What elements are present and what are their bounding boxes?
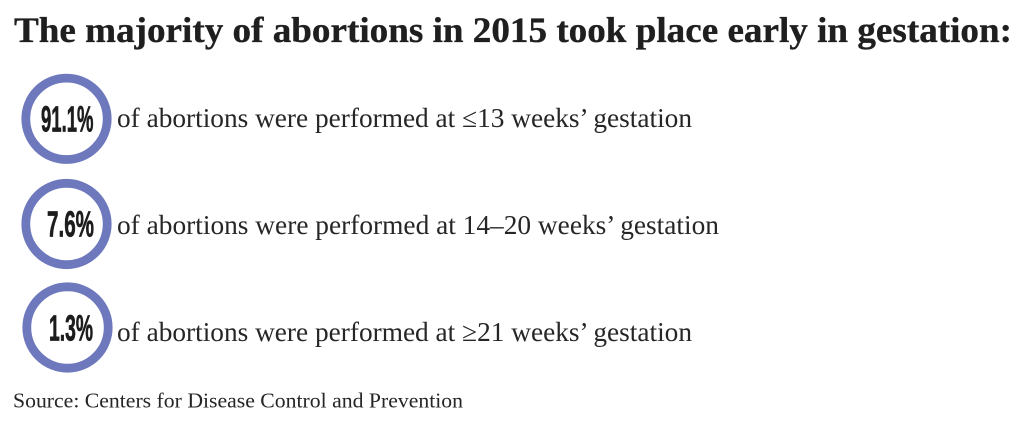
icon: ring 7.6% (26, 183, 107, 265)
value: 7.6%: 7.6% (47, 204, 94, 244)
title: The majority of abortions in 2015 took place early in gestation: (14, 10, 1012, 50)
row: 1.3% at 21 weeks or more (27, 287, 693, 368)
icon: ring 91.1% (26, 78, 107, 160)
description: row 1: of abortions were performed at ≤13 weeks’ gestation (117, 103, 693, 133)
description: row 2: of abortions were performed at 14–20 weeks’ gestation (117, 210, 719, 240)
row: 7.6% at 14-20 weeks (26, 183, 719, 265)
value: 1.3%: 1.3% (49, 308, 93, 348)
value: 91.1%: 91.1% (41, 98, 94, 140)
icon: ring 1.3% (27, 287, 108, 368)
source: Source: Centers for Disease Control and Prevention (13, 388, 464, 412)
row: 91.1% at 13 weeks or less (26, 78, 693, 160)
description: row 3: of abortions were performed at ≥21 weeks’ gestation (117, 317, 693, 347)
